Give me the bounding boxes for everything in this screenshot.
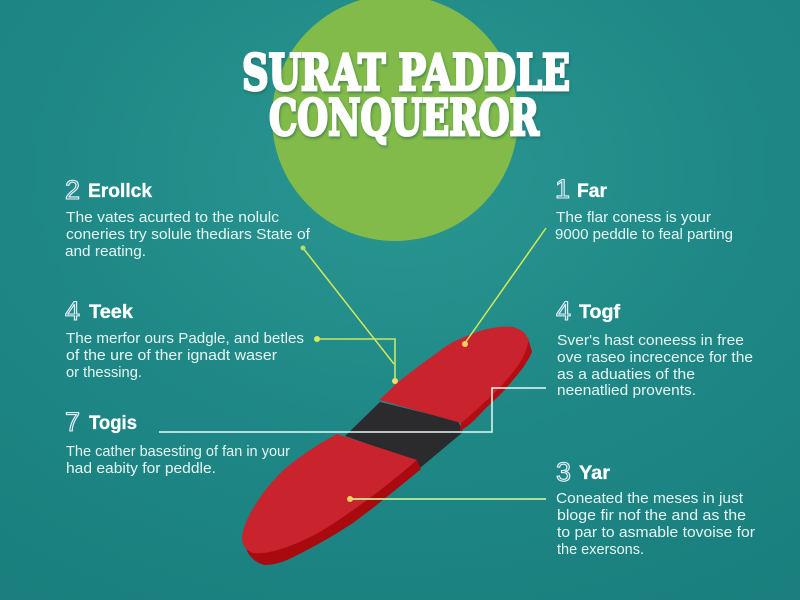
body text [66,331,304,381]
body text: neenatlied provents. [557,383,696,399]
body text [557,333,753,399]
panel: Erollck [65,175,311,260]
connector dots [300,246,468,502]
body text: bloge fir nof the and as the [557,508,746,524]
connector: Yar [350,498,546,500]
connector: Togis and Togf [159,388,546,432]
heading: Erollck [88,181,152,202]
body text [556,491,755,558]
paddle lower blade [242,434,421,565]
number 4: 4 [65,296,80,326]
body text: the exersons. [557,542,644,558]
heading: Togf [579,302,621,323]
body text: 9000 peddle to feal parting [555,227,733,243]
body text: Sver's hast coneess in free [557,333,744,349]
body text: as a aduaties of the [557,367,695,383]
panel: Yar [556,457,755,558]
green circle [272,0,518,241]
number 4: 4 [556,296,571,326]
body text: ove raseo increcence for the [557,350,753,366]
body text: and reating. [65,244,146,260]
panel: Far [555,174,733,243]
number 3: 3 [556,457,571,487]
panel: Togis [65,407,290,477]
title: CONQUEROR [269,88,539,147]
number 7: 7 [65,407,80,437]
connector: Erollck [303,248,394,364]
body text [555,210,733,243]
body text: or thessing. [66,365,142,381]
body text: Coneated the meses in just [556,491,743,507]
body text: The flar coness is your [556,210,711,226]
connector: Teek [318,339,395,381]
body text: coneries try solule thediars State of [66,227,311,243]
panel: Teek [65,296,304,381]
title [242,43,570,147]
body text: had eabity for peddle. [66,461,216,477]
title: SURAT PADDLE [242,43,570,102]
body text: of the ure of ther ignadt waser [66,348,277,364]
connector lines [159,228,546,499]
heading: Teek [89,302,133,323]
paddle illustration [242,327,532,565]
heading: Yar [579,463,611,484]
panel: Togf [556,296,753,399]
number 1: 1 [555,174,570,204]
heading: Far [577,181,608,202]
heading: Togis [89,413,137,434]
paddle upper blade [379,327,532,431]
connector: Far [465,228,546,343]
number 2: 2 [65,175,80,205]
body text: to par to asmable tovoise for [557,525,755,541]
body text [65,210,311,260]
body text [66,444,290,477]
body text: The cather basesting of fan in your [66,444,290,460]
body text: The vates acurted to the nolulc [66,210,279,226]
body text: The merfor ours Padgle, and betles [66,331,304,347]
paddle handle [345,402,463,468]
